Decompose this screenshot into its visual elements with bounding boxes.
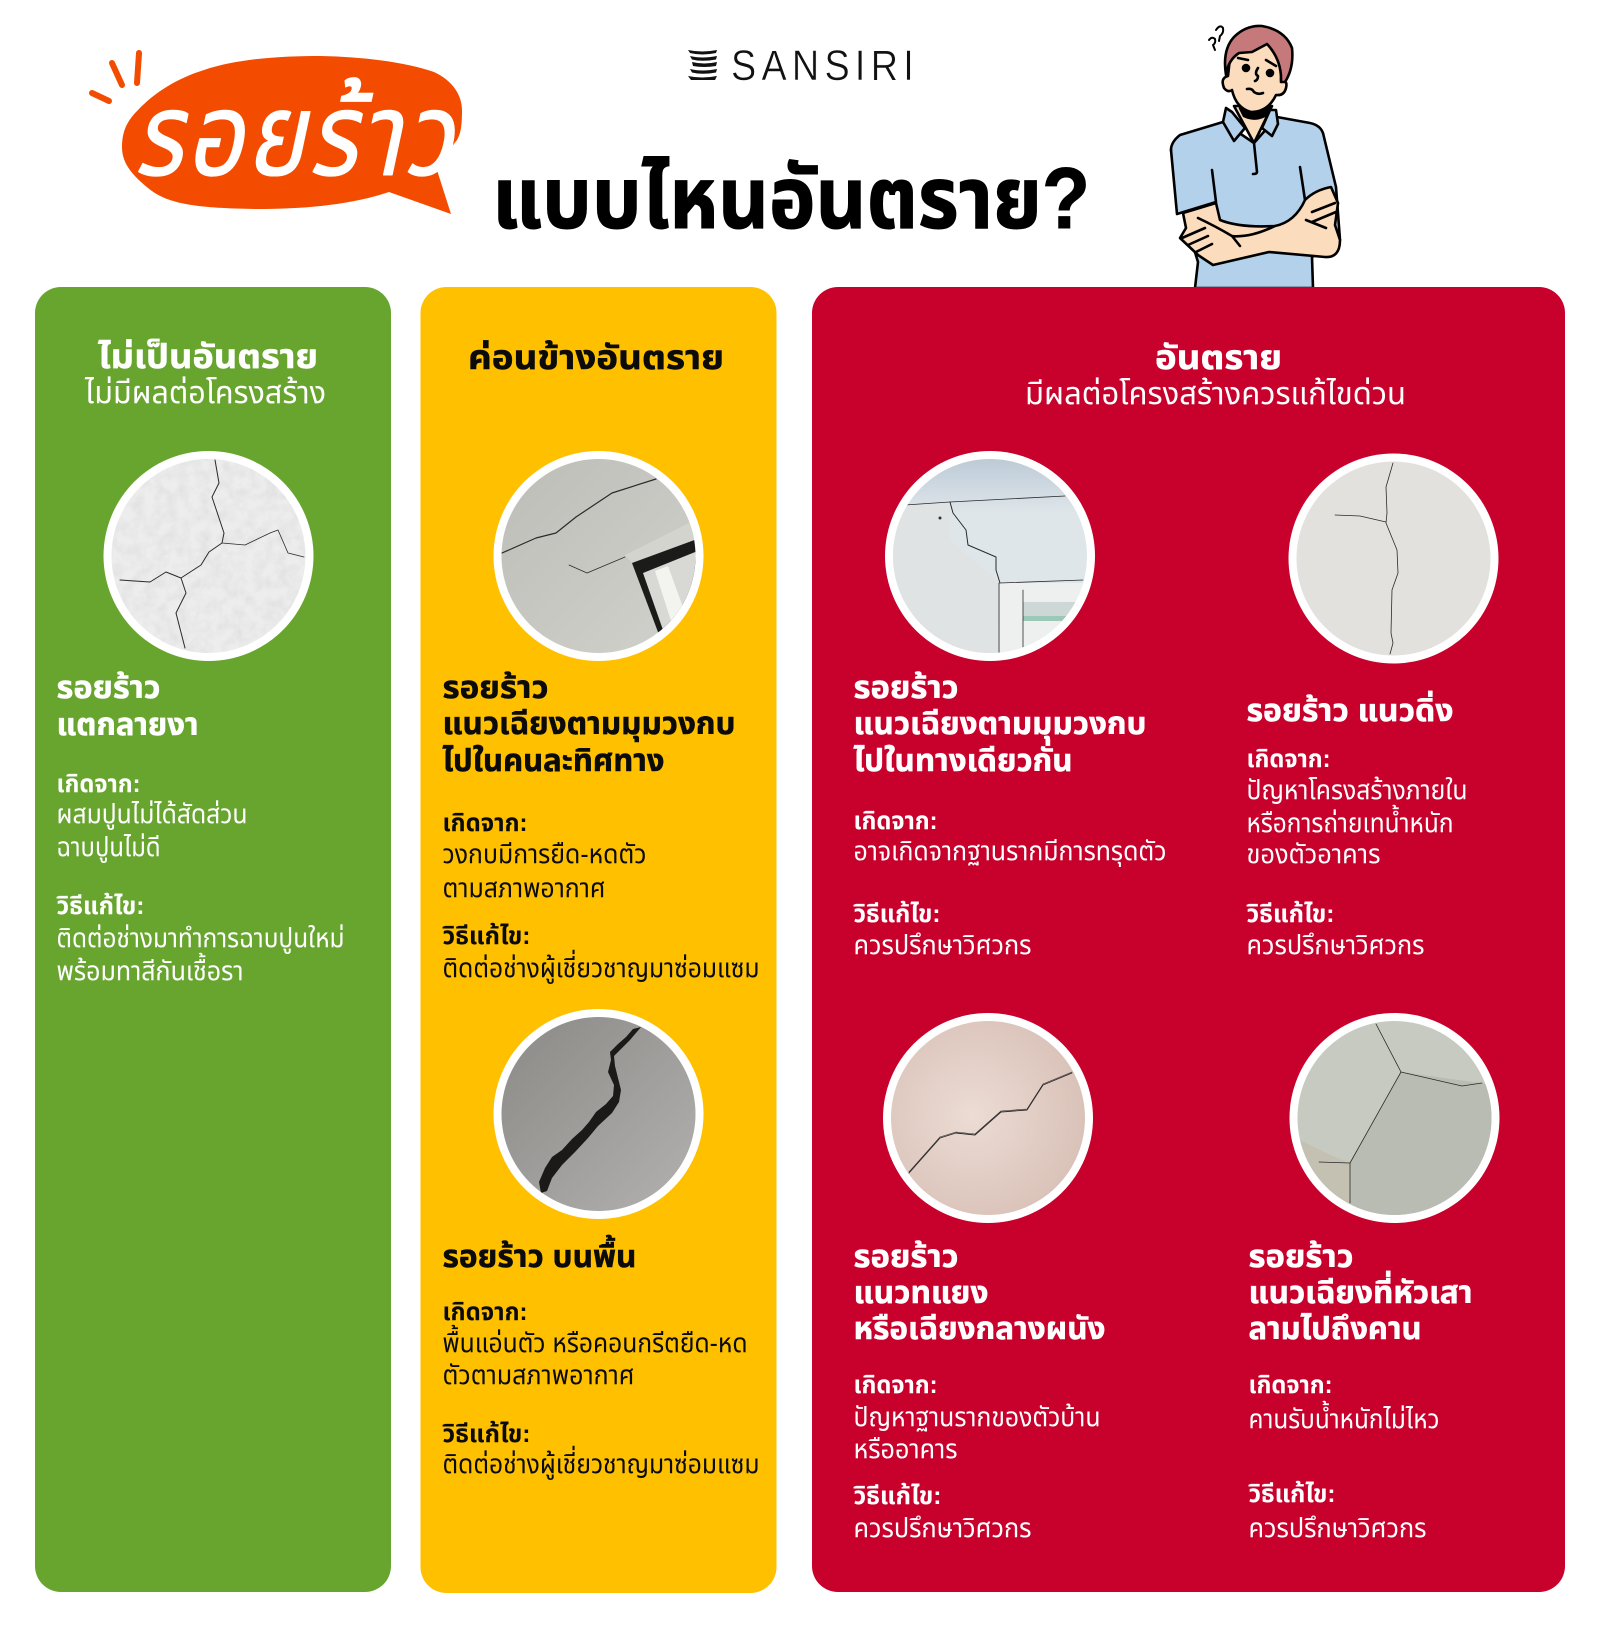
text: floor crack: ติดต่อช่างผู้เชี่ยวชาญมาซ่อมแซม <box>442 1445 760 1480</box>
text: diagonal mid-wall crack: เกิดจาก: <box>854 1371 938 1399</box>
illustration: confused man <box>1171 26 1340 288</box>
text: spider cracks: ฉาบปูนไม่ดี <box>56 832 160 863</box>
text: spider cracks: พร้อมทาสีกันเชื้อรา <box>56 952 244 986</box>
text: diagonal mid-wall crack: แนวทแยง <box>854 1275 988 1310</box>
logo: Sansiri <box>688 42 919 90</box>
photo: crack above door frame <box>885 451 1095 661</box>
panel: dangerous (red) <box>812 287 1565 1592</box>
text: diagonal mid-wall crack: ควรปรึกษาวิศวกร <box>854 1513 1032 1543</box>
text: spider cracks: รอยร้าว <box>56 670 160 705</box>
text: diagonal mid-wall crack <box>853 1239 1106 1543</box>
text: floor crack: รอยร้าว บนพื้น <box>442 1234 636 1274</box>
text: diagonal mid-wall crack: รอยร้าว <box>854 1239 958 1274</box>
sleeve lines <box>1171 150 1216 214</box>
text: spider cracks: ติดต่อช่างมาทำการฉาบปูนใหม่ <box>56 923 344 954</box>
text: diagonal crack one direction: รอยร้าว <box>854 670 958 705</box>
shirt <box>1171 117 1340 288</box>
text: diagonal crack one direction <box>853 670 1166 960</box>
text: diagonal crack at frame, different directions: วงกบมีการยืด-หดตัว <box>442 839 646 869</box>
text: column-top crack: ควรปรึกษาวิศวกร <box>1248 1513 1426 1543</box>
text: vertical crack: เกิดจาก: <box>1246 745 1330 773</box>
wordmark: SANSIRI <box>731 42 919 90</box>
heading: ไม่เป็นอันตราย <box>98 338 318 376</box>
text: diagonal crack one direction: แนวเฉียงตามมุมวงกบ <box>854 706 1146 742</box>
text: column-top crack: ลามไปถึงคาน <box>1248 1311 1422 1346</box>
text: diagonal crack one direction: ควรปรึกษาวิศวกร <box>854 930 1032 960</box>
hair <box>1225 26 1292 82</box>
text: column-top crack: วิธีแก้ไข: <box>1248 1480 1336 1508</box>
text: diagonal crack at frame, different directions: ไปในคนละทิศทาง <box>442 743 664 778</box>
text: floor crack: ตัวตามสภาพอากาศ <box>442 1360 634 1390</box>
icon: stripes <box>688 50 717 80</box>
text: floor crack: วิธีแก้ไข: <box>442 1420 530 1448</box>
text: diagonal crack one direction: อาจเกิดจากฐานรากมีการทรุดตัว <box>854 836 1166 867</box>
text: diagonal crack at frame, different directions: ติดต่อช่างผู้เชี่ยวชาญมาซ่อมแซม <box>442 949 760 984</box>
text: vertical crack <box>1246 690 1468 960</box>
text: floor crack: เกิดจาก: <box>442 1298 528 1326</box>
text: spider cracks: วิธีแก้ไข: <box>56 892 144 920</box>
neck and V opening <box>1234 106 1272 143</box>
panel background <box>420 287 776 1593</box>
text: spider cracks <box>56 670 344 986</box>
text: diagonal mid-wall crack: หรือเฉียงกลางผนัง <box>854 1311 1106 1346</box>
text: diagonal crack at frame, different directions <box>442 670 760 984</box>
text: vertical crack: ของตัวอาคาร <box>1246 839 1380 869</box>
text: vertical crack: วิธีแก้ไข: <box>1246 900 1334 928</box>
photo: diagonal mid-wall crack <box>883 1013 1093 1223</box>
photo: crack from column top to beam <box>1290 1013 1500 1223</box>
heading: ค่อนข้างอันตราย <box>468 339 724 377</box>
speech bubble logo: รอยร้าว <box>92 53 478 214</box>
panel background <box>812 287 1565 1592</box>
text: column-top crack: เกิดจาก: <box>1248 1371 1332 1399</box>
text: diagonal crack at frame, different directions: แนวเฉียงตามมุมวงกบ <box>442 706 736 742</box>
icon: burst strokes <box>92 53 139 101</box>
neck shadow <box>1240 106 1270 119</box>
bubble text: รอยร้าว <box>129 70 478 200</box>
text: spider cracks: ผสมปูนไม่ได้สัดส่วน <box>56 799 248 830</box>
text: diagonal mid-wall crack: ปัญหาฐานรากของตัวบ้าน <box>854 1402 1100 1432</box>
text: diagonal crack one direction: เกิดจาก: <box>854 807 938 835</box>
heading: อันตราย <box>1155 339 1282 377</box>
text: spider cracks: แตกลายงา <box>56 707 198 742</box>
subheading: มีผลต่อโครงสร้างควรแก้ไขด่วน <box>1025 376 1406 411</box>
question marks <box>1209 26 1223 50</box>
speech bubble shape <box>122 56 462 214</box>
photo: floor crack <box>494 1009 704 1219</box>
text: vertical crack: รอยร้าว แนวดิ่ง <box>1246 690 1454 728</box>
text: diagonal crack one direction: ไปในทางเดียวกั่น <box>854 739 1072 778</box>
text: diagonal crack at frame, different directions: วิธีแก้ไข: <box>442 922 530 950</box>
text: vertical crack: ควรปรึกษาวิศวกร <box>1246 930 1424 960</box>
text: vertical crack: ปัญหาโครงสร้างภายใน <box>1246 775 1468 805</box>
title: แบบไหนอันตราย? <box>492 151 1090 247</box>
text: column-top crack <box>1248 1239 1472 1543</box>
photo: map cracks <box>104 451 314 661</box>
face <box>1223 40 1286 112</box>
text: diagonal mid-wall crack: วิธีแก้ไข: <box>853 1482 942 1510</box>
text: column-top crack: คานรับน้ำหนักไม่ไหว <box>1248 1400 1440 1434</box>
panel background <box>35 287 391 1592</box>
text: column-top crack: แนวเฉียงที่หัวเสา <box>1248 1270 1472 1310</box>
text: column-top crack: รอยร้าว <box>1248 1239 1354 1274</box>
text: diagonal crack at frame, different directions: ตามสภาพอากาศ <box>442 873 606 903</box>
text: diagonal crack at frame, different directions: เกิดจาก: <box>442 809 528 837</box>
collar <box>1223 108 1245 141</box>
eyes and mouth <box>1243 65 1249 71</box>
text: diagonal crack one direction: วิธีแก้ไข: <box>853 900 940 928</box>
arms <box>1180 187 1340 265</box>
photo: vertical crack <box>1288 454 1498 664</box>
panel: somewhat dangerous (yellow) <box>420 287 776 1593</box>
photo: crack at window corner <box>494 451 704 661</box>
text: floor crack: พื้นแอ่นตัว หรือคอนกรีตยืด-หด <box>442 1324 748 1358</box>
subheading: ไม่มีผลต่อโครงสร้าง <box>84 375 326 410</box>
text: floor crack <box>442 1234 760 1480</box>
text: spider cracks: เกิดจาก: <box>56 770 140 798</box>
text: diagonal mid-wall crack: หรืออาคาร <box>854 1434 958 1464</box>
text: vertical crack: หรือการถ่ายเทน้ำหนัก <box>1246 804 1454 838</box>
text: diagonal crack at frame, different directions: รอยร้าว <box>442 670 548 705</box>
panel: not dangerous (green) <box>35 287 391 1592</box>
